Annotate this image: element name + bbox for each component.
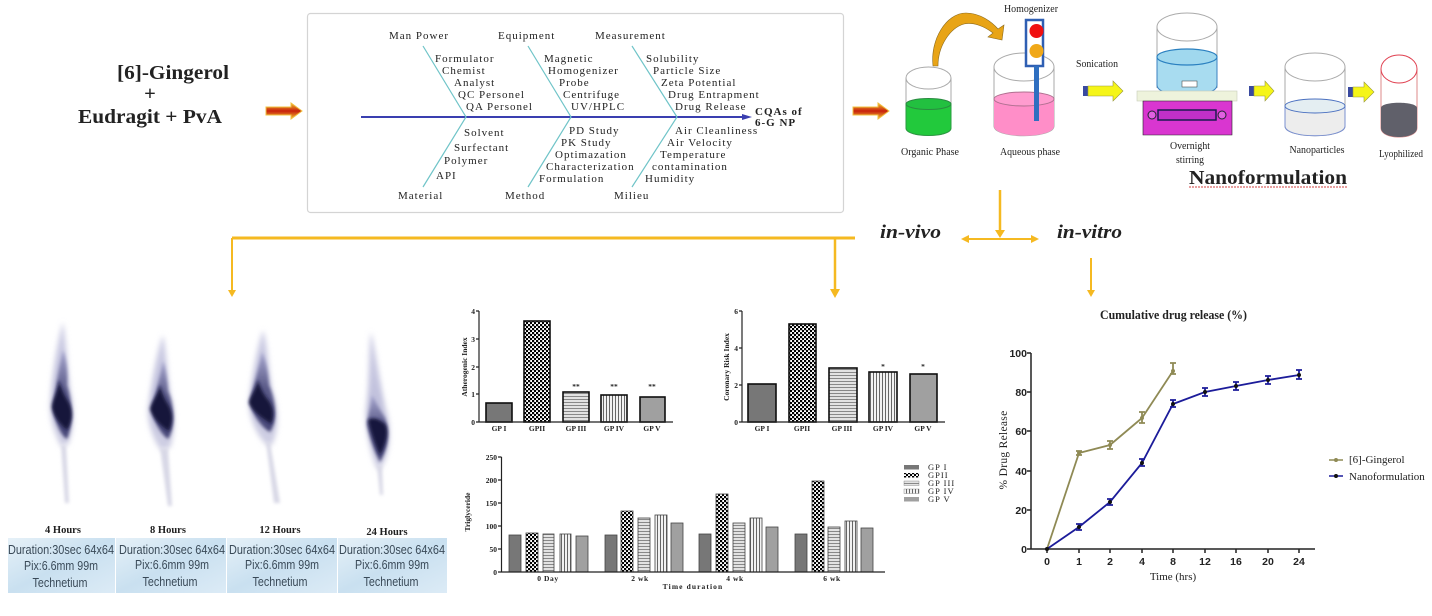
fishbone items lower: API xyxy=(436,170,457,182)
fishbone items upper: Particle Size xyxy=(653,65,721,77)
scan time labels xyxy=(45,525,408,538)
scan parameter table: Pix:6.6mm 99m xyxy=(355,558,429,572)
chart: triglyceride: 100 xyxy=(486,522,497,531)
label: in-vivo: in-vivo xyxy=(880,222,941,243)
fishbone outcome label xyxy=(755,106,803,129)
process step labels xyxy=(901,3,1423,166)
chart: cumulative drug release: 12 xyxy=(1199,556,1211,568)
legend: triglyceride groups: GP III xyxy=(928,478,955,488)
fishbone category labels: Equipment xyxy=(498,30,555,42)
chart: atherogenic index: GP IV xyxy=(604,424,625,433)
fishbone items upper: Analyst xyxy=(454,77,495,89)
scan: 4 hours xyxy=(50,322,73,503)
chart: cumulative drug release: Time (hrs) xyxy=(1150,571,1197,583)
fishbone items upper: Probe xyxy=(559,77,590,89)
icon: homogenizer xyxy=(1026,20,1044,121)
fishbone items upper: Magnetic xyxy=(544,53,594,65)
chart: cumulative drug release: 16 xyxy=(1230,556,1242,568)
chart: atherogenic index: ** xyxy=(610,382,618,391)
chart: triglyceride: 2 wk xyxy=(631,574,649,583)
scan time labels: 8 Hours xyxy=(150,525,186,536)
chart: triglyceride: 50 xyxy=(490,545,497,554)
chart: atherogenic index: GP I xyxy=(492,424,506,433)
scan: 24 hours xyxy=(366,332,390,495)
fishbone items upper: Drug Entrapment xyxy=(668,89,760,101)
scan parameter table: Pix:6.6mm 99m xyxy=(135,558,209,572)
fishbone items upper: QA Personel xyxy=(466,101,533,113)
fishbone items lower xyxy=(436,125,758,185)
arrow: sonication xyxy=(1083,81,1123,101)
chart: cumulative drug release: 1 xyxy=(1076,556,1082,568)
fishbone items lower: Polymer xyxy=(444,155,488,167)
process step labels: Sonication xyxy=(1076,58,1118,70)
chart: cumulative drug release: 20 xyxy=(1015,505,1027,517)
process step labels: Lyophilized xyxy=(1379,148,1423,160)
arrow: to lyophilized xyxy=(1348,82,1374,102)
fishbone category labels: Method xyxy=(505,190,545,202)
scan parameter table: Duration:30sec 64x64 xyxy=(229,543,335,557)
process step labels: Homogenizer xyxy=(1004,3,1058,15)
scan parameter table xyxy=(8,538,447,593)
chart: triglyceride: 4 wk xyxy=(726,574,744,583)
chart: atherogenic index: 2 xyxy=(471,363,475,372)
fishbone items lower: Humidity xyxy=(645,173,695,185)
process step labels: Nanoparticles xyxy=(1290,144,1344,156)
scan parameter table: Technetium xyxy=(252,575,308,589)
fishbone items lower: contamination xyxy=(652,161,728,173)
process step labels: Overnight xyxy=(1170,140,1210,152)
chart: coronary risk index: * xyxy=(881,362,885,371)
fishbone items lower: Solvent xyxy=(464,127,505,139)
chart: triglyceride: 0 Day xyxy=(537,574,559,583)
fishbone items upper xyxy=(435,53,760,113)
chart: coronary risk index: 0 xyxy=(734,418,738,427)
chart: coronary risk index: GP IV xyxy=(873,424,894,433)
chart: coronary risk index: Coronary Risk Index xyxy=(722,333,731,401)
fishbone items upper: Formulator xyxy=(435,53,494,65)
panel: nanoformulation process xyxy=(901,3,1423,189)
scan parameter table: Duration:30sec 64x64 xyxy=(339,543,445,557)
legend: drug release xyxy=(1329,454,1425,483)
fishbone items lower: Surfectant xyxy=(454,142,509,154)
chart: triglyceride: 200 xyxy=(486,476,497,485)
chart: cumulative drug release xyxy=(998,348,1315,583)
scan time labels: 12 Hours xyxy=(259,525,301,536)
chart: coronary risk index: GP III xyxy=(832,424,852,433)
chart: cumulative drug release: 80 xyxy=(1015,387,1027,399)
fishbone items upper: QC Personel xyxy=(458,89,525,101)
chart: atherogenic index: 1 xyxy=(471,390,475,399)
chart: atherogenic index xyxy=(460,307,673,433)
series: nanoformulation xyxy=(1045,370,1302,551)
arrow: organic into aqueous xyxy=(933,13,1004,66)
icon: stirring beaker on magnetic stirrer xyxy=(1137,13,1237,135)
chart: triglyceride: Triglyceride xyxy=(463,492,472,532)
text: starting materials: + xyxy=(144,83,156,105)
chart: atherogenic index: 0 xyxy=(471,418,475,427)
chart: cumulative drug release: 2 xyxy=(1107,556,1113,568)
chart: coronary risk index: 6 xyxy=(734,307,738,316)
text: starting materials: [6]-Gingerol xyxy=(117,62,229,84)
text: starting materials: Eudragit + PvA xyxy=(78,106,222,128)
scan parameter table: Technetium xyxy=(142,575,198,589)
chart: coronary risk index: * xyxy=(921,362,925,371)
panel: fishbone diagram xyxy=(308,14,844,212)
arrow: materials to fishbone xyxy=(266,103,302,119)
legend: triglyceride groups: GP I xyxy=(928,462,948,472)
vial: lyophilized xyxy=(1381,55,1417,137)
fishbone items lower: PD Study xyxy=(569,125,620,137)
chart: triglyceride: 6 wk xyxy=(823,574,841,583)
fishbone items upper: Solubility xyxy=(646,53,699,65)
chart: triglyceride: Time duration xyxy=(663,582,723,591)
chart: cumulative drug release: 4 xyxy=(1139,556,1145,568)
chart: coronary risk index: GP V xyxy=(914,424,932,433)
chart: cumulative drug release: % Drug Release xyxy=(998,411,1010,489)
panel: scintigraphy images xyxy=(8,322,447,593)
fishbone category labels: Milieu xyxy=(614,190,649,202)
chart: cumulative drug release: 8 xyxy=(1170,556,1176,568)
scan time labels: 4 Hours xyxy=(45,525,81,536)
process step labels: Organic Phase xyxy=(901,146,959,158)
arrow: fishbone to process xyxy=(853,103,889,119)
chart: coronary risk index: GPII xyxy=(794,424,810,433)
heading: nanoformulation: Nanoformulation xyxy=(1189,167,1347,189)
scan parameter table: Pix:6.6mm 99m xyxy=(245,558,319,572)
fishbone items upper: Homogenizer xyxy=(548,65,619,77)
fishbone branches xyxy=(423,46,677,187)
chart: atherogenic index: GP III xyxy=(566,424,586,433)
chart: cumulative drug release: 0 xyxy=(1021,544,1027,556)
legend: drug release: [6]-Gingerol xyxy=(1349,454,1405,466)
fishbone items upper: Zeta Potential xyxy=(661,77,736,89)
fishbone items lower: Air Cleanliness xyxy=(675,125,758,137)
fishbone items lower: Formulation xyxy=(539,173,604,185)
fishbone items upper: UV/HPLC xyxy=(571,101,625,113)
fishbone items upper: Chemist xyxy=(442,65,486,77)
fishbone items upper: Centrifuge xyxy=(563,89,620,101)
beaker: organic phase xyxy=(906,67,951,136)
legend: triglyceride groups: GP V xyxy=(928,494,951,504)
scan: 12 hours xyxy=(249,330,280,503)
fishbone items upper: Drug Release xyxy=(675,101,747,113)
arrows: study branches xyxy=(228,190,1095,298)
fishbone category labels: Material xyxy=(398,190,443,202)
chart: coronary risk index: GP I xyxy=(755,424,769,433)
chart: atherogenic index: 3 xyxy=(471,335,475,344)
chart: cumulative drug release: 100 xyxy=(1009,348,1027,360)
fishbone items lower: Air Velocity xyxy=(667,137,733,149)
text: starting materials xyxy=(78,62,229,128)
fishbone items lower: Characterization xyxy=(546,161,635,173)
chart: cumulative drug release: 0 xyxy=(1044,556,1050,568)
chart: cumulative drug release: 24 xyxy=(1293,556,1305,568)
fishbone category labels: Man Power xyxy=(389,30,449,42)
legend: triglyceride groups xyxy=(904,462,955,504)
chart: atherogenic index: ** xyxy=(648,382,656,391)
series: 6-gingerol xyxy=(1047,363,1176,549)
fishbone outcome label: 6-G NP xyxy=(755,117,796,129)
chart: cumulative drug release: 20 xyxy=(1262,556,1274,568)
title: cumulative drug release: Cumulative drug release (%) xyxy=(1100,308,1247,322)
fishbone items lower: Temperature xyxy=(660,149,726,161)
scan parameter table: Pix:6.6mm 99m xyxy=(24,559,98,573)
scan: 8 hours xyxy=(148,335,174,506)
chart: triglyceride: 0 xyxy=(493,568,497,577)
fishbone category labels xyxy=(389,30,666,202)
scan time labels: 24 Hours xyxy=(366,527,408,538)
chart: cumulative drug release: 60 xyxy=(1015,426,1027,438)
chart: coronary risk index xyxy=(722,307,945,433)
fishbone items lower: Optimazation xyxy=(555,149,627,161)
fishbone items lower: PK Study xyxy=(561,137,612,149)
label: in-vitro: in-vitro xyxy=(1057,222,1122,243)
legend: triglyceride groups: GP IV xyxy=(928,486,955,496)
process step labels: Aqueous phase xyxy=(1000,146,1060,158)
scan parameter table: Technetium xyxy=(364,575,418,589)
legend: drug release: Nanoformulation xyxy=(1349,471,1425,483)
beaker: nanoparticles xyxy=(1285,53,1345,136)
chart: coronary risk index: 4 xyxy=(734,344,738,353)
scan parameter table: Technetium xyxy=(32,576,88,590)
fishbone outcome label: CQAs of xyxy=(755,106,803,118)
arrow: to nanoparticles xyxy=(1249,81,1274,101)
scan parameter table: Duration:30sec 64x64 xyxy=(119,543,225,557)
chart: atherogenic index: 4 xyxy=(471,307,475,316)
chart: atherogenic index: GP V xyxy=(643,424,661,433)
chart: atherogenic index: ** xyxy=(572,382,580,391)
beaker: aqueous phase xyxy=(994,53,1054,136)
scan parameter table: Duration:30sec 64x64 xyxy=(8,543,114,557)
chart: atherogenic index: GPII xyxy=(529,424,545,433)
process step labels: stirring xyxy=(1176,154,1204,166)
chart: atherogenic index: Atherogenic Index xyxy=(460,337,469,397)
chart: coronary risk index: 2 xyxy=(734,381,738,390)
chart: triglyceride: 250 xyxy=(486,453,497,462)
fishbone spine xyxy=(361,114,752,120)
chart: cumulative drug release: 40 xyxy=(1015,466,1027,478)
chart: triglyceride: 150 xyxy=(486,499,497,508)
legend: triglyceride groups: GPII xyxy=(928,470,949,480)
chart: triglyceride xyxy=(463,453,885,591)
fishbone category labels: Measurement xyxy=(595,30,666,42)
